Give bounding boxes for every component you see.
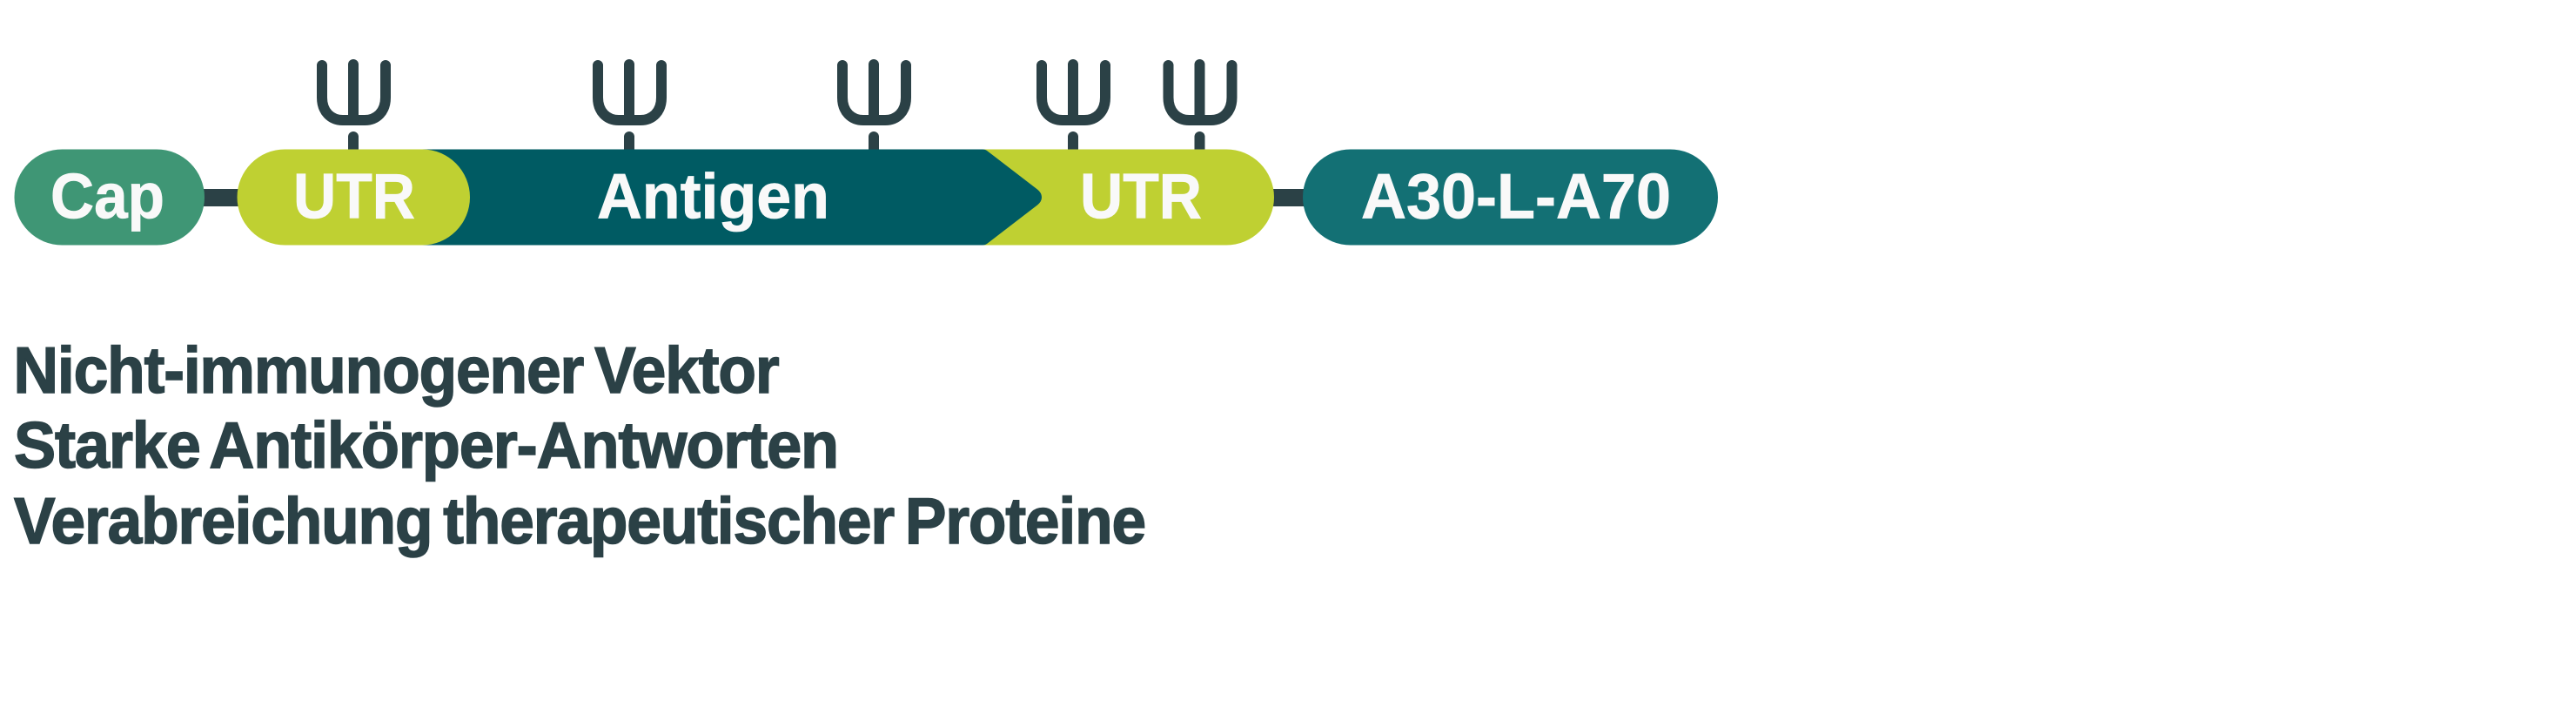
segment: 3' UTR: UTR (1080, 162, 1202, 232)
icon: modification fork 4 (1042, 64, 1105, 150)
segment: 5' UTR: UTR (293, 162, 415, 232)
icon: modification fork 2 (598, 64, 661, 150)
text: Starke Antikörper-Antworten: Starke Antikörper-Antworten (14, 408, 838, 482)
connector line: UTR to poly-A (1266, 189, 1310, 206)
segment: Antigen (409, 150, 1042, 246)
icon: modification fork 3 (842, 64, 906, 150)
text: Verabreichung therapeutischer Proteine: Verabreichung therapeutischer Proteine (14, 484, 1145, 557)
icon: modification fork 1 (322, 64, 386, 150)
segment: Antigen: Antigen (597, 162, 829, 232)
icon: modification fork 5 (1168, 64, 1232, 150)
segment: A30-L-A70 (1303, 150, 1718, 246)
segment: Cap: Cap (50, 162, 164, 232)
segment: A30-L-A70: A30-L-A70 (1361, 162, 1671, 232)
connector line: cap to UTR (200, 189, 244, 206)
segment: Cap (14, 150, 205, 246)
segment: 3' UTR (975, 150, 1274, 246)
segment: 5' UTR (237, 150, 470, 246)
text: Nicht-immunogener Vektor: Nicht-immunogener Vektor (14, 334, 779, 407)
